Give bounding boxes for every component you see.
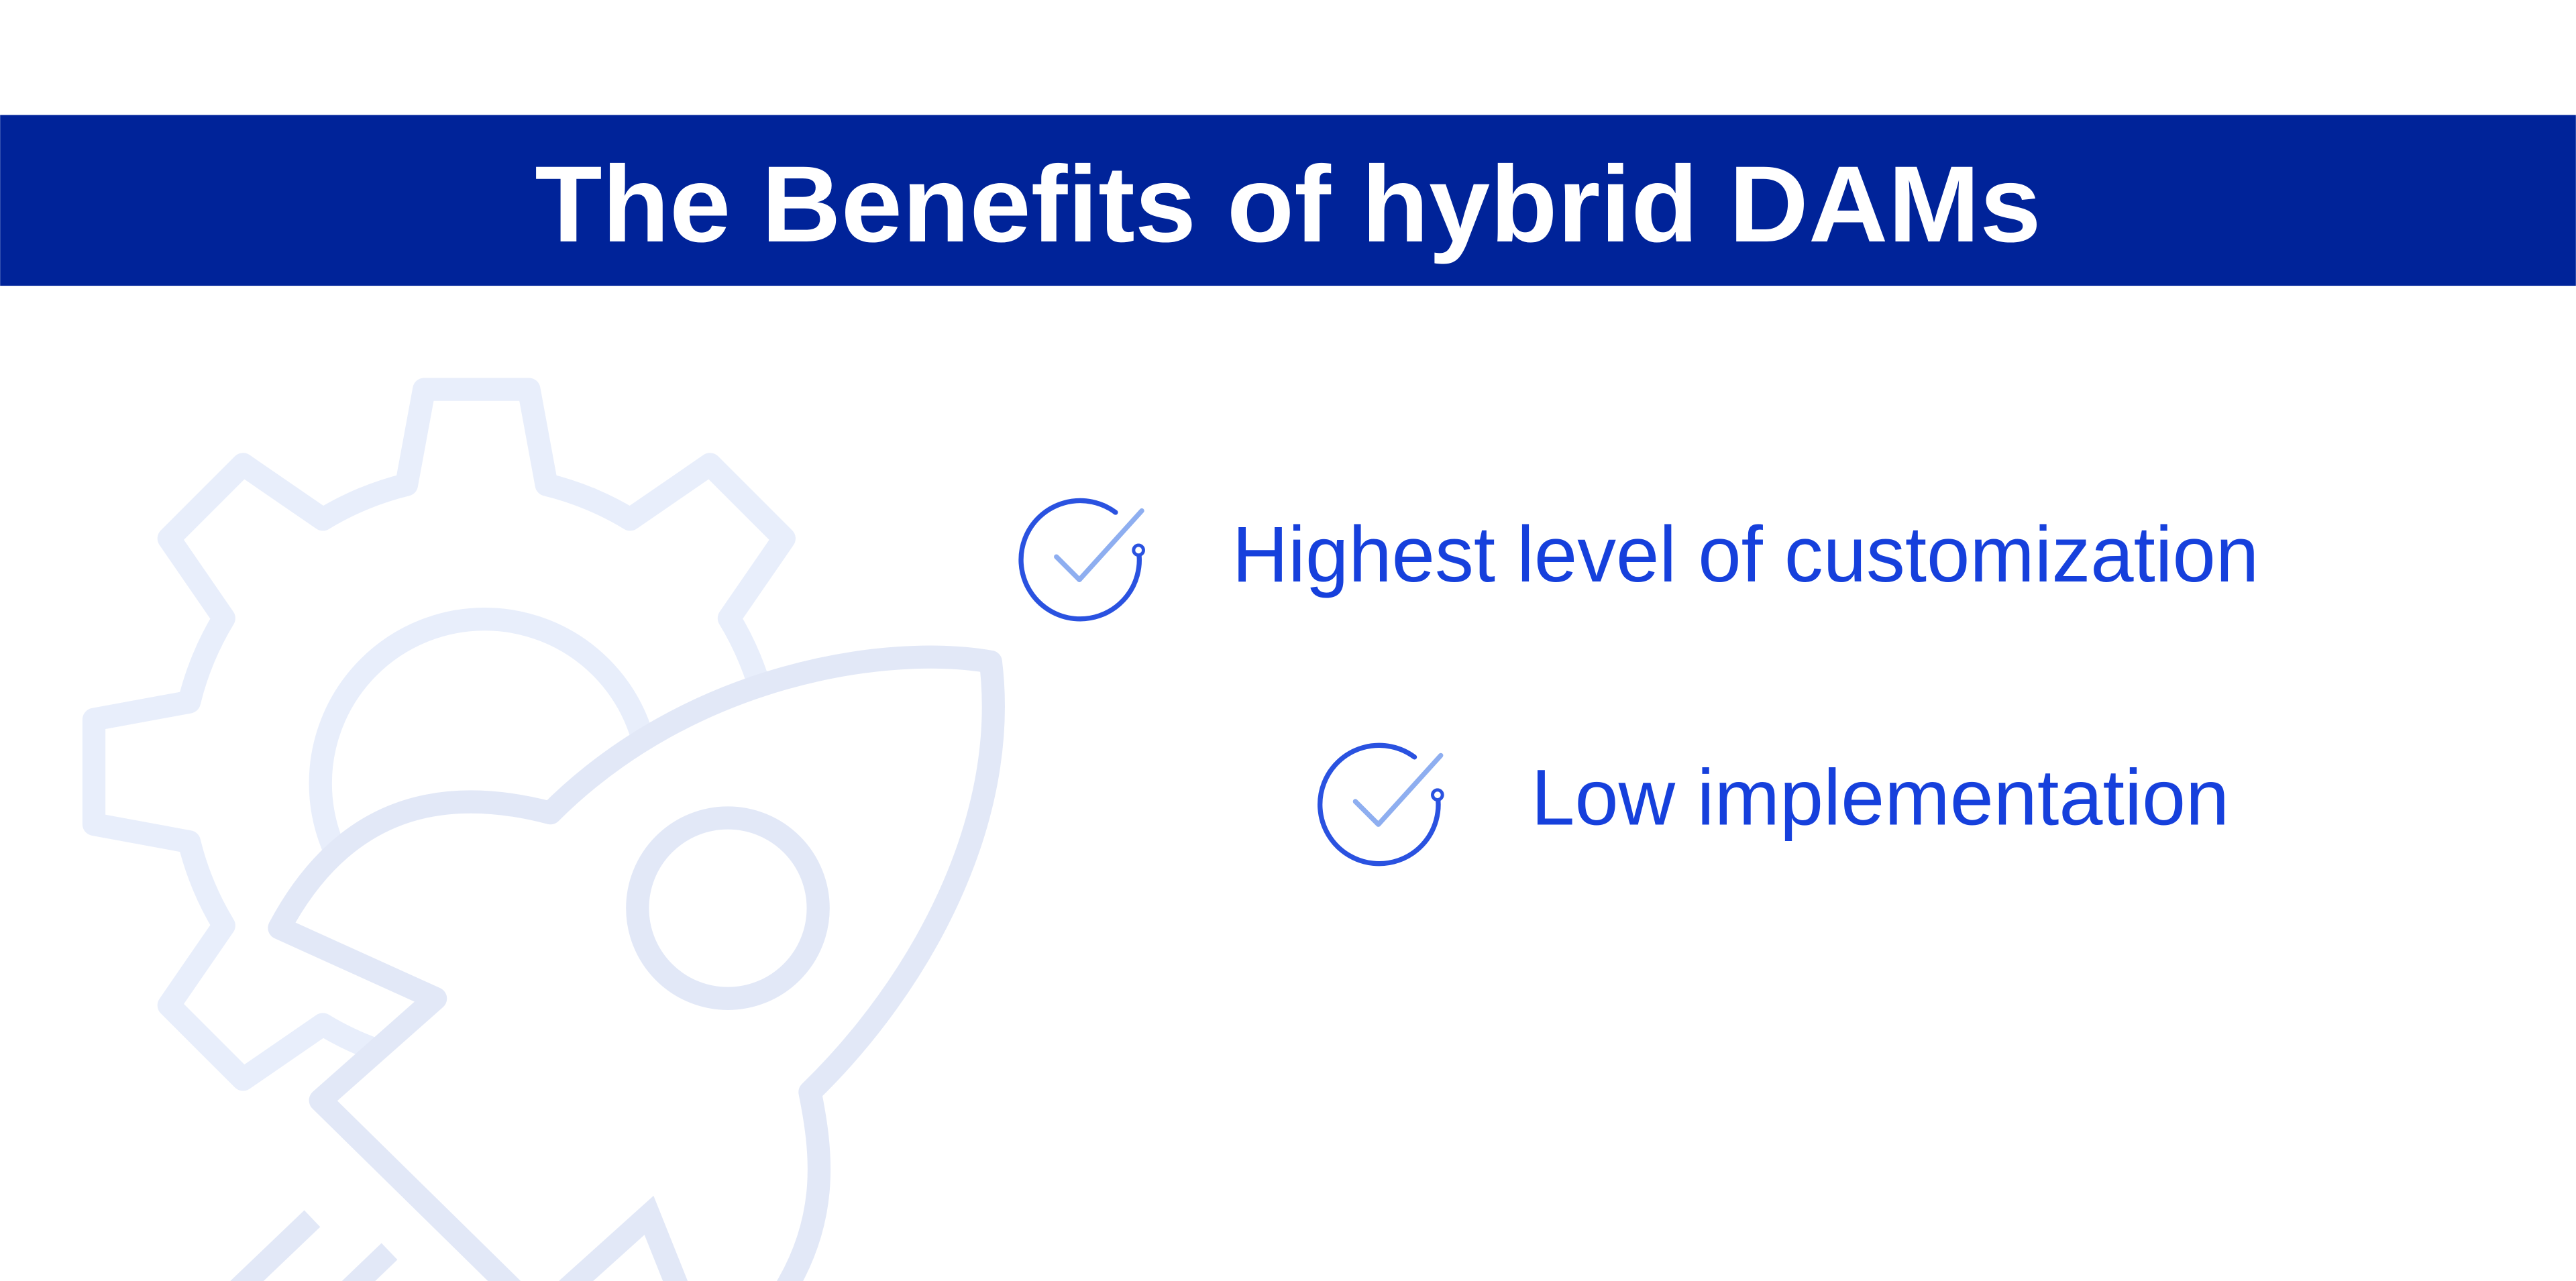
benefit 1 — [1021, 501, 2259, 619]
icon: check 1 — [1021, 501, 1144, 619]
benefit 2 — [1320, 745, 2229, 864]
benefit 2: Low implementation — [1531, 753, 2229, 841]
header banner — [0, 115, 2576, 286]
icon: rocket — [238, 654, 996, 1281]
benefit 1: Highest level of customization — [1232, 510, 2259, 598]
icon: gear — [94, 390, 859, 1154]
icon: check 2 — [1320, 745, 1442, 864]
title: The Benefits of hybrid DAMs — [535, 144, 2041, 265]
